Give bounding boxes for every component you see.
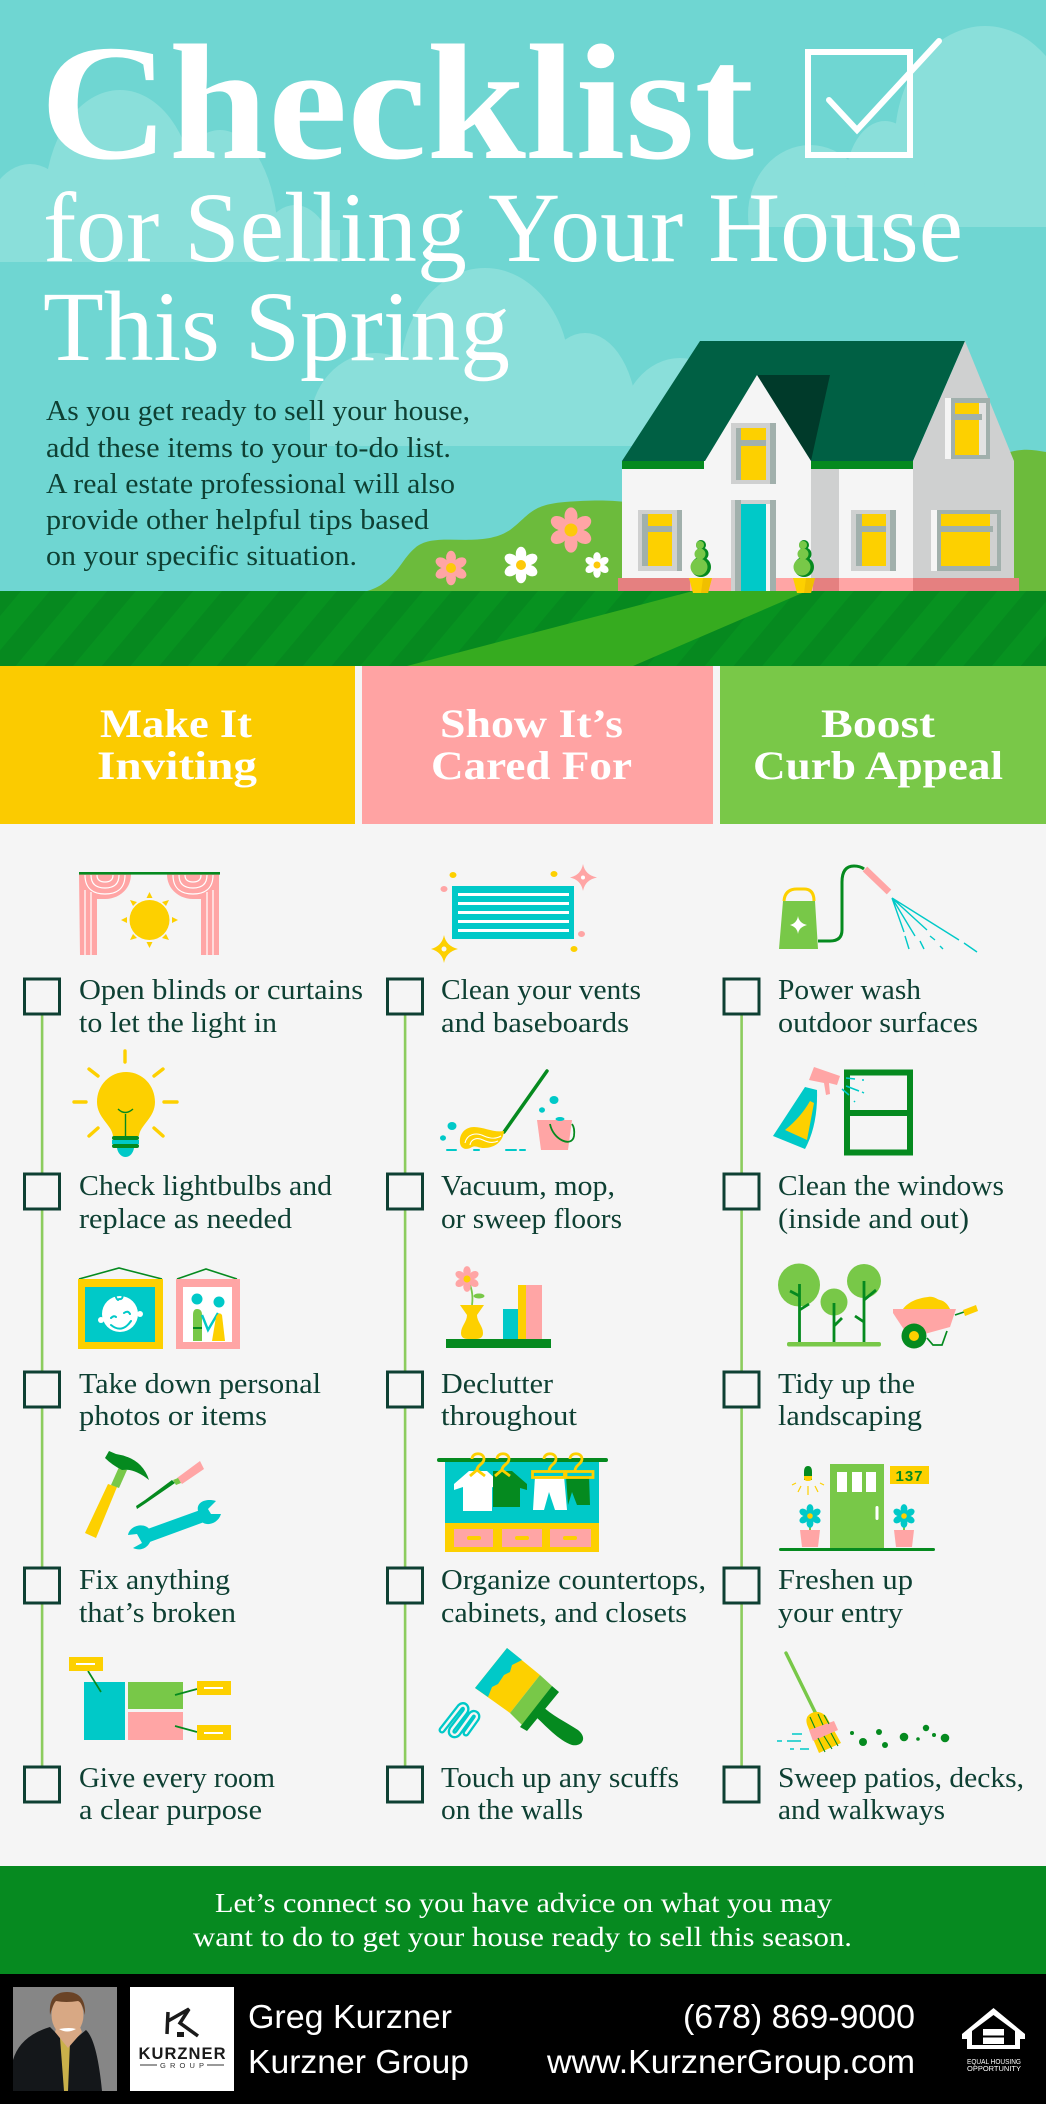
company logo: KURZNER [138, 2045, 226, 2063]
call to action banner [0, 1866, 1046, 1974]
flower white [503, 547, 539, 583]
company logo: GROUP [160, 2061, 204, 2070]
checklist text column 2: Clean your vents [441, 975, 641, 1006]
checklist text column 3: Tidy up the [778, 1369, 915, 1400]
checklist text column 3: landscaping [778, 1401, 922, 1432]
checklist text column 2: on the walls [441, 1795, 583, 1826]
checklist text column 3: Clean the windows [778, 1171, 1004, 1202]
checklist text column 2: Vacuum, mop, [441, 1171, 615, 1202]
panel: checklist background [0, 666, 1046, 1866]
heading: Make It Inviting: Make It [100, 701, 253, 746]
walls [913, 461, 1014, 578]
intro paragraph [46, 396, 470, 572]
heading: Boost Curb Appeal [720, 666, 1046, 824]
icon: spray bottle and window [773, 1067, 913, 1152]
checklist text column 2: Touch up any scuffs [441, 1763, 679, 1794]
icon: equal housing: OPPORTUNITY [967, 2066, 1021, 2073]
agent name: Greg Kurzner [248, 1998, 452, 2035]
title [40, 11, 963, 382]
heading: Boost Curb Appeal: Curb Appeal [753, 743, 1003, 788]
icon: tools [85, 1451, 221, 1549]
checklist text column 1 [79, 975, 363, 1826]
agent name [248, 1998, 469, 2080]
checklist text column 1: to let the light in [79, 1008, 277, 1039]
flower white small [584, 552, 610, 578]
icon: equal housing: EQUAL HOUSING [967, 2059, 1021, 2066]
flower small pink [434, 551, 468, 585]
icon: paint brush [442, 1648, 583, 1745]
roof [622, 341, 965, 461]
icon: title checkbox [808, 41, 939, 155]
cloud right [748, 26, 1046, 227]
cloud left [0, 90, 340, 262]
flower large pink [548, 507, 594, 553]
lawn [0, 591, 1046, 666]
intro paragraph: A real estate professional will also [46, 469, 455, 500]
hill with flowers [363, 450, 1046, 592]
checklist text column 1: photos or items [79, 1401, 267, 1432]
contact details: www.KurznerGroup.com [546, 2043, 915, 2080]
checklist text column 1: Give every room [79, 1763, 275, 1794]
icon: curtains and sun [79, 872, 220, 955]
checklist text column 3: your entry [778, 1598, 903, 1629]
checklist text column 3: outdoor surfaces [778, 1008, 978, 1039]
icon: vent [431, 864, 597, 963]
icon: front entry [779, 1464, 935, 1551]
window lower left [638, 510, 682, 571]
checklist text column 2: and baseboards [441, 1008, 629, 1039]
company logo [130, 1987, 234, 2091]
heading: Show It's Cared For: Cared For [431, 743, 632, 788]
title: This Spring [43, 271, 510, 382]
checklist text column 3: Power wash [778, 975, 921, 1006]
checklist text column 2: Declutter [441, 1369, 554, 1400]
icon: lightbulb [74, 1051, 177, 1157]
house [618, 341, 1019, 593]
icon: trees and wheelbarrow [778, 1264, 978, 1348]
icon: shelf with vase and books [446, 1266, 551, 1348]
header scene background [0, 0, 1046, 591]
intro paragraph: add these items to your to-do list. [46, 433, 451, 464]
door [731, 500, 776, 591]
checklist text column 3: (inside and out) [778, 1204, 969, 1235]
window gable [731, 423, 776, 484]
icon: broom and dust [777, 1653, 949, 1753]
foundation [618, 578, 1019, 591]
checklist text column 2: or sweep floors [441, 1204, 622, 1235]
checklist text column 2 [441, 975, 706, 1826]
intro paragraph: As you get ready to sell your house, [46, 396, 470, 427]
checklist text column 2: throughout [441, 1401, 577, 1432]
icon: closet [437, 1454, 608, 1552]
topiary right [793, 540, 815, 593]
checklist text column 2: Organize countertops, [441, 1565, 706, 1596]
window large right [931, 510, 1001, 571]
icon: equal housing [962, 2008, 1025, 2073]
checklist text column 1: Take down personal [79, 1369, 321, 1400]
window lower middle [851, 510, 896, 571]
window upper right [945, 398, 990, 459]
agent photo [13, 1987, 117, 2091]
topiary left [689, 540, 712, 593]
heading: Show It's Cared For [362, 666, 713, 824]
intro paragraph: provide other helpful tips based [46, 505, 429, 536]
heading: Boost Curb Appeal: Boost [821, 701, 936, 746]
timeline column 2 [388, 979, 422, 1802]
cloud middle [310, 268, 688, 446]
heading: Show It's Cared For: Show It’s [440, 701, 623, 746]
checklist text column 1: replace as needed [79, 1204, 292, 1235]
intro paragraph: on your specific situation. [46, 541, 357, 572]
title: for Selling Your House [43, 172, 963, 283]
checklist text column 1: Fix anything [79, 1565, 230, 1596]
call to action banner: want to do to get your house ready to sell this season. [193, 1922, 852, 1952]
agent name: Kurzner Group [248, 2043, 469, 2080]
checklist text column 3: Freshen up [778, 1565, 913, 1596]
timeline column 1 [24, 979, 60, 1802]
checklist text column 3 [778, 975, 1024, 1826]
icon: photo frames [78, 1268, 240, 1349]
contact details [546, 1998, 915, 2080]
checklist text column 3: and walkways [778, 1795, 945, 1826]
contact details: (678) 869-9000 [683, 1998, 915, 2035]
call to action banner: Let’s connect so you have advice on what you may [215, 1888, 833, 1918]
checklist text column 1: a clear purpose [79, 1795, 262, 1826]
checklist text column 3: Sweep patios, decks, [778, 1763, 1024, 1794]
checklist text column 1: that’s broken [79, 1598, 236, 1629]
checklist text column 2: cabinets, and closets [441, 1598, 687, 1629]
icon: front entry: 137 [895, 1468, 924, 1485]
title: Checklist [40, 11, 754, 194]
icon: power washer [779, 866, 977, 952]
icon: room plan [69, 1657, 231, 1740]
heading: Make It Inviting [0, 666, 355, 824]
checklist text column 1: Check lightbulbs and [79, 1171, 332, 1202]
checklist text column 1: Open blinds or curtains [79, 975, 363, 1006]
footer bar [0, 1974, 1046, 2104]
icon: mop and bucket [440, 1071, 574, 1150]
heading: Make It Inviting: Inviting [97, 743, 257, 788]
timeline column 3 [724, 979, 759, 1802]
